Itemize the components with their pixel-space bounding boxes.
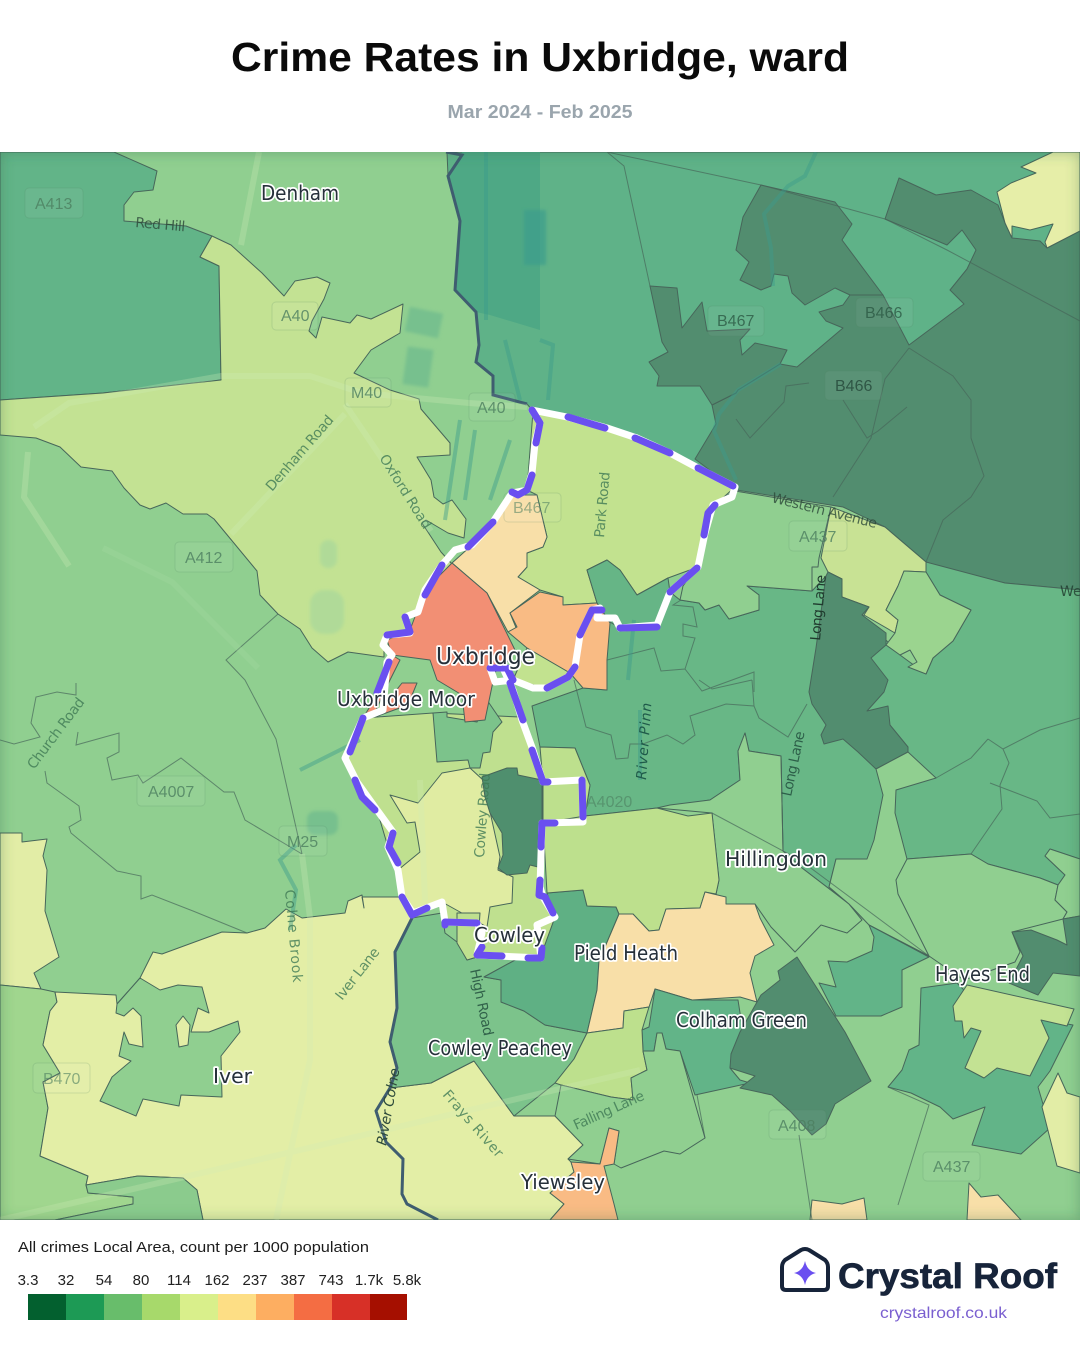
legend colour scale xyxy=(28,1294,407,1320)
ward area: teal notch xyxy=(587,560,670,628)
brand name: Crystal Roof xyxy=(838,1257,1057,1296)
road label: Colne Brook: Colne Brook xyxy=(281,889,305,984)
road label: Falling Lane: Falling Lane xyxy=(571,1088,647,1134)
place label: Colham Green: Colham Green xyxy=(676,1008,807,1032)
legend values: 1.7k xyxy=(355,1272,384,1289)
logo: Crystal Roof xyxy=(782,1249,1057,1322)
map areas xyxy=(0,152,1080,1220)
road label: Oxford Road: Oxford Road xyxy=(376,452,434,532)
road label: A408: A408 xyxy=(778,1118,815,1135)
place label: Denham: Denham xyxy=(261,181,339,205)
ward area: south strip xyxy=(540,747,590,823)
legend title: All crimes Local Area, count per 1000 population xyxy=(18,1239,369,1256)
ward boundaries: thin lines xyxy=(0,152,1080,1220)
rivers and streams xyxy=(280,152,816,930)
legend values: 162 xyxy=(204,1272,230,1289)
ward area: south xyxy=(349,712,554,954)
road label: B466: B466 xyxy=(865,305,902,322)
ward area: salmon xyxy=(387,563,515,722)
road label: A4007: A4007 xyxy=(148,784,194,801)
road label: B467 ward: B467 xyxy=(513,500,550,517)
road label: Iver Lane: Iver Lane xyxy=(333,945,383,1003)
choropleth map xyxy=(0,146,1080,1226)
road label: M25: M25 xyxy=(287,834,318,851)
place label: Pield Heath: Pield Heath xyxy=(574,941,678,965)
legend values: 80 xyxy=(133,1272,149,1289)
ward boundary xyxy=(345,410,735,958)
place label: Hayes End: Hayes End xyxy=(935,962,1030,986)
river: dark main channel xyxy=(376,152,527,1220)
place label: Cowley Peachey: Cowley Peachey xyxy=(428,1036,572,1060)
road label: A40: A40 xyxy=(281,308,310,325)
title: Crime Rates in Uxbridge, ward xyxy=(231,34,849,80)
legend values: 54 xyxy=(96,1272,112,1289)
place label: Iver: Iver xyxy=(213,1064,253,1088)
place label: Yiewsley: Yiewsley xyxy=(520,1170,605,1194)
road label: A437 south: A437 xyxy=(933,1159,970,1176)
legend values: 387 xyxy=(280,1272,306,1289)
legend values: 5.8k xyxy=(393,1272,422,1289)
road label: Park Road: Park Road xyxy=(592,471,614,538)
road label: Western Avenue: Western Avenue xyxy=(770,490,879,532)
road shield boxes xyxy=(25,188,980,1181)
legend values: 237 xyxy=(242,1272,268,1289)
road label: Long Lane south: Long Lane xyxy=(779,730,809,798)
road label: Long Lane north: Long Lane xyxy=(808,574,830,641)
road label: High Road: High Road xyxy=(466,968,496,1037)
road label: A412: A412 xyxy=(185,550,222,567)
road label: Cowley Road: Cowley Road xyxy=(472,772,494,858)
road label: Church Road: Church Road xyxy=(24,695,88,772)
place label: Uxbridge Moor: Uxbridge Moor xyxy=(337,687,476,711)
legend values xyxy=(18,1272,422,1289)
road label: Red Hill: Red Hill xyxy=(135,215,186,235)
legend xyxy=(18,1239,422,1320)
ward area: cream xyxy=(452,495,547,632)
subtitle: date range: Mar 2024 - Feb 2025 xyxy=(448,102,632,122)
legend values: 114 xyxy=(167,1272,191,1289)
roads xyxy=(0,152,640,1220)
place label: Hillingdon: Hillingdon xyxy=(725,847,827,871)
ward area: small block xyxy=(457,913,480,960)
road label: B470: B470 xyxy=(43,1071,80,1088)
road label: B466 lower: B466 xyxy=(835,378,872,395)
road label: A413: A413 xyxy=(35,196,72,213)
ward area: north xyxy=(518,411,735,605)
lakes xyxy=(307,210,546,835)
place label: Cowley: Cowley xyxy=(474,923,545,947)
road label: Frays River: Frays River xyxy=(439,1087,506,1161)
road label: River Colne: River Colne xyxy=(374,1067,403,1147)
ward area: orange xyxy=(508,592,610,690)
website: crystalroof.co.uk xyxy=(880,1305,1008,1322)
road label: River Pinn: River Pinn xyxy=(634,702,655,780)
road label: A40 east: A40 xyxy=(477,400,506,417)
map edge shading xyxy=(0,146,1080,1226)
road label: Denham Road: Denham Road xyxy=(263,412,337,495)
road label: B467: B467 xyxy=(717,313,754,330)
legend values: 743 xyxy=(318,1272,344,1289)
place label: Uxbridge: Uxbridge xyxy=(436,644,535,670)
road label: A4020: A4020 xyxy=(586,794,632,811)
icon: house with star xyxy=(782,1249,828,1290)
road label: M40: M40 xyxy=(351,385,382,402)
road label: A437: A437 xyxy=(799,529,836,546)
legend values: 3.3 xyxy=(18,1272,38,1289)
legend values: 32 xyxy=(58,1272,74,1289)
